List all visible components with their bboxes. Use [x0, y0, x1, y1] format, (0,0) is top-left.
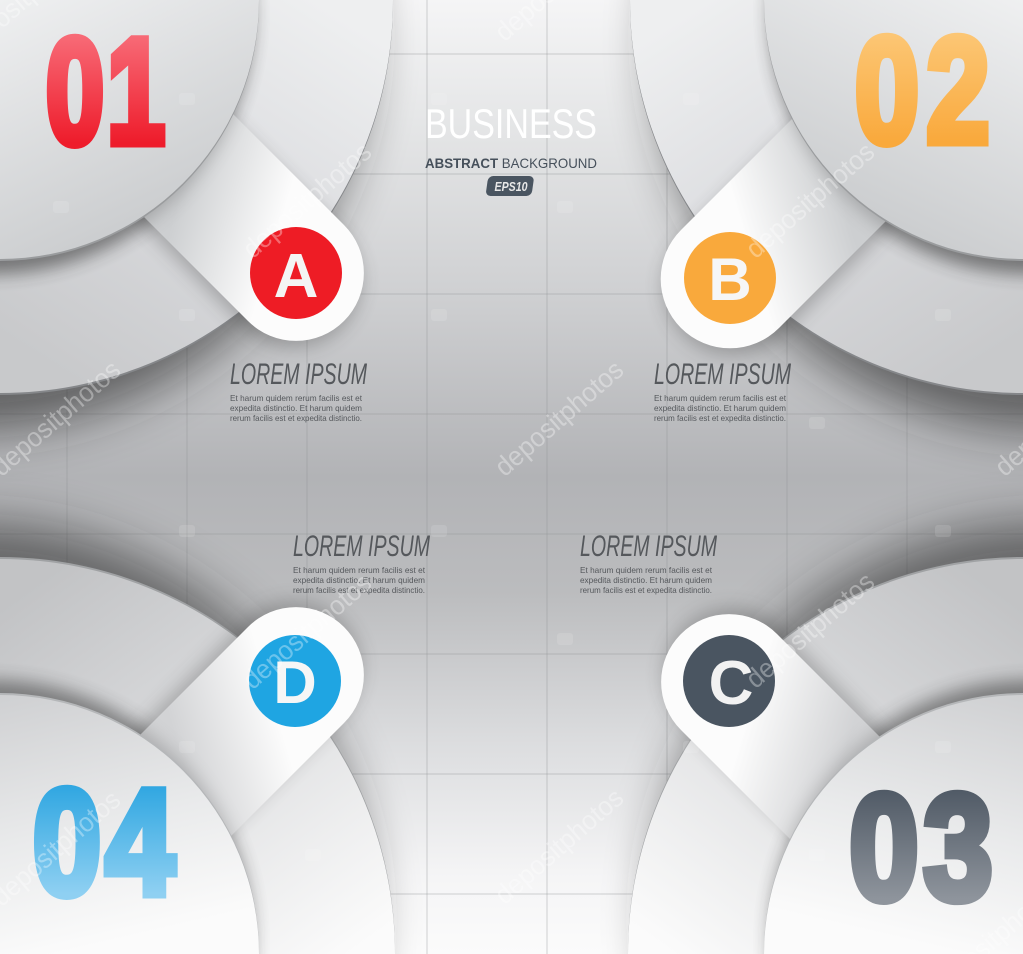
subtitle: ABSTRACT BACKGROUND: [425, 155, 597, 171]
disc 03: [764, 695, 1023, 954]
number 02: [855, 7, 990, 175]
panel: corner 04 with tab D: [0, 521, 395, 954]
text block D: expedita distinctio. Et harum quidem: [293, 575, 425, 585]
disc 02: [764, 0, 1023, 259]
badge B: B: [708, 246, 752, 313]
text block B: rerum facilis est et expedita distinctio.: [654, 413, 786, 423]
text block D: rerum facilis est et expedita distinctio.: [293, 585, 425, 595]
text block D: Et harum quidem rerum facilis est et: [293, 565, 426, 575]
number 04: 4: [105, 759, 175, 927]
number 02: 0: [855, 8, 919, 174]
badge D: [249, 635, 341, 727]
text block C: [580, 530, 717, 595]
text block C: LOREM IPSUM: [580, 530, 717, 563]
badge D: D: [273, 649, 317, 716]
text block D: [293, 530, 430, 595]
panel: corner 02 with tab B: [630, 0, 1023, 431]
number 03: 3: [923, 764, 993, 932]
text block B: expedita distinctio. Et harum quidem: [654, 403, 786, 413]
text block B: Et harum quidem rerum facilis est et: [654, 393, 787, 403]
text block C: Et harum quidem rerum facilis est et: [580, 565, 713, 575]
badge C: C: [709, 649, 753, 718]
watermarks: depositphotos: [489, 782, 629, 910]
number 02: 2: [926, 7, 990, 175]
disc 01: [0, 0, 259, 259]
text block A: LOREM IPSUM: [230, 358, 367, 391]
text block A: Et harum quidem rerum facilis est et: [230, 393, 363, 403]
watermarks: depositphotos: [740, 136, 880, 264]
badge A: A: [274, 242, 318, 311]
number 03: 0: [849, 764, 919, 932]
panel: corner 01 with tab A: [0, 0, 393, 431]
text block B: [654, 358, 791, 423]
tab A: [128, 101, 364, 341]
number 01: 1: [107, 9, 165, 175]
number 01: [46, 9, 165, 175]
text block C: rerum facilis est et expedita distinctio.: [580, 585, 712, 595]
watermarks: depositphotos: [740, 566, 880, 694]
EPS10 tag: EPS10: [494, 179, 528, 194]
EPS10 tag: [485, 176, 534, 196]
badge C: [683, 635, 775, 727]
text block A: rerum facilis est et expedita distinctio.: [230, 413, 362, 423]
number 04: 0: [33, 759, 101, 927]
watermarks: depositphotos: [237, 567, 377, 695]
badge A: [250, 227, 342, 319]
watermark camera icons: [53, 93, 951, 861]
text block A: [230, 358, 367, 423]
watermarks: depositphotos: [489, 354, 629, 482]
number 04: [33, 759, 175, 927]
badge B: [684, 232, 776, 324]
watermarks: depositphotos: [237, 136, 377, 264]
tab D: [128, 607, 364, 847]
text block A: expedita distinctio. Et harum quidem: [230, 403, 362, 413]
tab C: [661, 614, 897, 854]
text block C: expedita distinctio. Et harum quidem: [580, 575, 712, 585]
panel: corner 03 with tab C: [628, 521, 1023, 954]
number 01: 0: [46, 9, 104, 175]
tab B: [661, 106, 899, 348]
text block B: LOREM IPSUM: [654, 358, 791, 391]
number 03: [849, 764, 993, 932]
disc 04: [0, 695, 259, 954]
title: BUSINESS: [425, 100, 597, 147]
text block D: LOREM IPSUM: [293, 530, 430, 563]
